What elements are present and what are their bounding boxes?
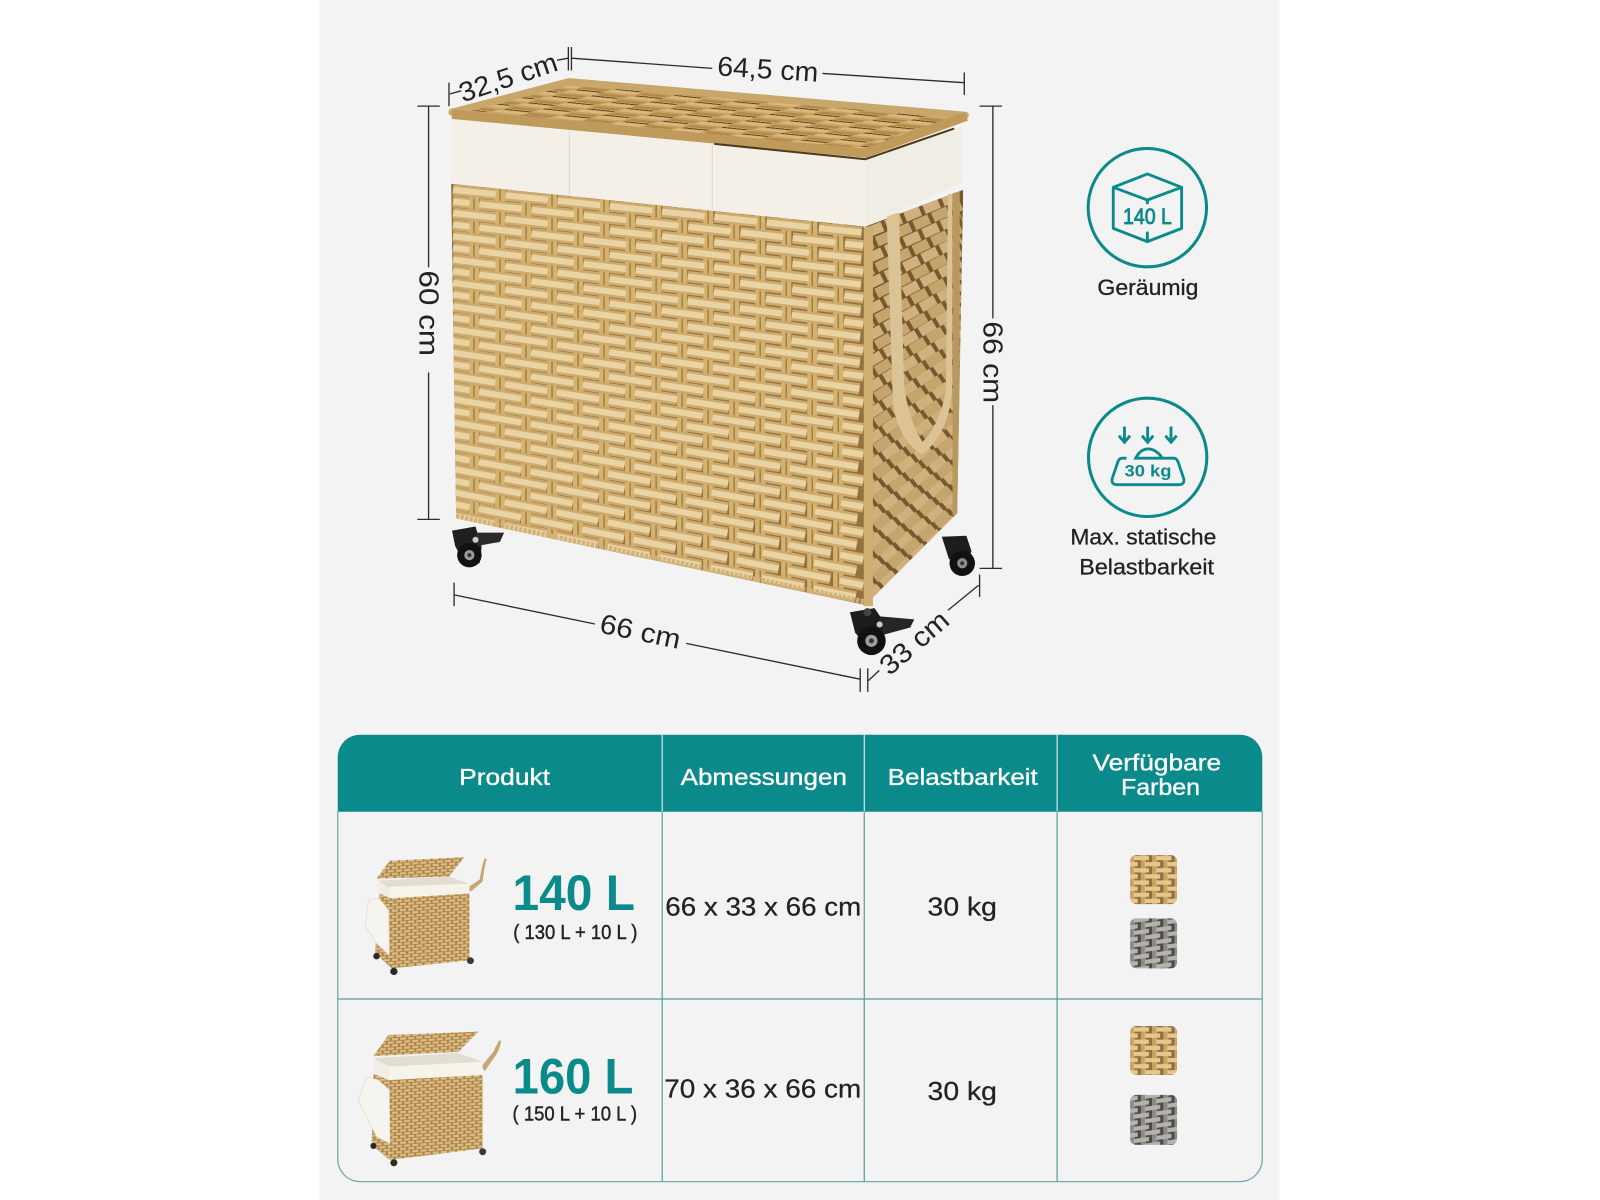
row 1 load capacity: 30 kg [928,894,997,922]
basket front wicker face [451,173,865,622]
row 2 load capacity: 30 kg [928,1078,997,1106]
row 2 capacity split: ( 150 L + 10 L ) [513,1104,637,1126]
row 1 product image: small basket 140 L [365,857,487,975]
row 2 dimensions: 70 x 36 x 66 cm [664,1075,861,1103]
dimension: bottom width 66 cm: 66 cm [597,608,683,655]
row 2 product image: small basket 160 L [358,1032,501,1166]
dimension: depth top 32,5 cm: 32,5 cm [455,46,561,108]
caster: front right [850,608,914,655]
dimension: height 66 cm: 66 cm [978,321,1009,403]
comparison table [338,735,1262,1182]
label: Max. statische Belastbarkeit: Belastbarkeit [1079,554,1215,579]
dimension: width top 64,5 cm [568,47,964,95]
icon: volume cube 140 L: 140 L [1123,204,1172,229]
row 1 dimensions: 66 x 33 x 66 cm [665,894,861,922]
panel: light grey product card [319,0,1280,1200]
row 1 capacity 140 L: 140 L [513,865,635,921]
label: Max. statische Belastbarkeit: Max. statische [1070,524,1216,549]
row 1 colour swatches [1130,855,1177,968]
icon: volume cube 140 L [1088,148,1207,267]
table grid [338,811,1262,1182]
row 2 colour swatches [1130,1026,1177,1145]
dimension: bottom depth 33 cm [868,574,980,681]
header labels: Verfügbare [1093,750,1221,776]
label: Geräumig: Geräumig [1097,275,1198,300]
caster: back right [942,536,975,576]
dimension: bottom width 66 cm [454,583,868,692]
lid shadow [714,129,954,159]
icon: load weight 30 kg [1088,398,1207,517]
carrying strap [887,194,952,454]
header labels [459,750,1221,800]
caster: front left [452,527,504,567]
header labels: Belastbarkeit [888,764,1038,790]
header labels: Abmessungen [681,764,847,790]
row 2 capacity 160 L: 160 L [513,1048,633,1104]
basket corner post [864,227,873,606]
label: Max. statische Belastbarkeit [1070,524,1216,579]
dimension: height 66 cm [978,106,1009,568]
fabric liner side band [865,127,962,227]
icon: load weight 30 kg: 30 kg [1124,463,1171,481]
dimension: height 60 cm: 60 cm [413,270,444,356]
liner seams [569,131,712,210]
dimension: bottom depth 33 cm: 33 cm [873,604,955,681]
header labels: Produkt [459,764,551,790]
table header bar [338,735,1262,812]
row 1 capacity split: ( 130 L + 10 L ) [513,922,637,944]
lid rim [452,82,965,153]
main basket photo illustration [450,80,975,655]
lid top [450,80,968,155]
fabric liner front band [451,118,865,227]
basket side wicker face [865,190,963,605]
dimension: height 60 cm [413,106,444,519]
dimension: width top 64,5 cm: 64,5 cm [716,50,819,88]
header labels: Farben [1121,774,1200,800]
